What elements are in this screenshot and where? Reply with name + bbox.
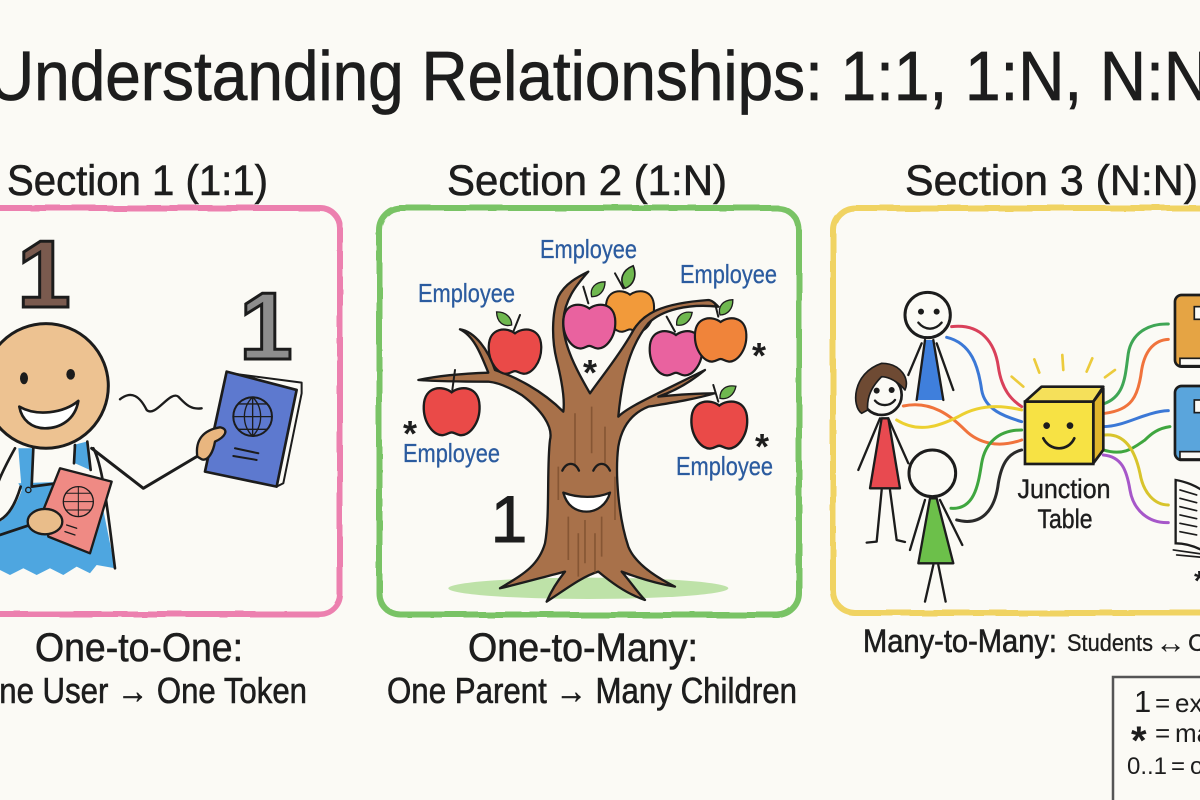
many markers: * [583, 352, 597, 393]
panel: one-to-many [379, 208, 799, 615]
heading: section 3: Section 3 (N:N) [905, 157, 1198, 205]
caption: one-to-one [0, 626, 307, 711]
many markers: * [403, 413, 417, 454]
label: junction table: Table [1038, 504, 1092, 534]
number 1: tree: 1 [491, 482, 527, 556]
heading: section 1: Section 1 (1:1) [7, 157, 268, 205]
label: employee lower left: Employee [403, 438, 500, 468]
pink panel frame [0, 208, 340, 614]
label: junction table: Junction [1018, 474, 1110, 504]
number 1: token: 1 [239, 273, 293, 380]
caption: one-to-one: One-to-One: [35, 626, 243, 670]
legend: exactly one: = [1155, 688, 1170, 718]
legend: optional: = [1171, 753, 1185, 780]
legend box [1113, 677, 1200, 800]
many markers: * [752, 335, 766, 376]
legend: optional: 0..1 [1127, 753, 1167, 780]
heading: section 2: Section 2 (1:N) [447, 157, 727, 205]
many markers: * [755, 426, 769, 467]
caption: one-to-many: One-to-Many: [468, 626, 698, 670]
many markers [403, 335, 769, 467]
caption: many-to-many [863, 623, 1200, 660]
green panel frame [379, 208, 799, 615]
caption: one-to-many: One Parent → Many Children [387, 670, 797, 711]
caption: many-to-many: Many-to-Many: [863, 623, 1057, 659]
illustration: apple tree [418, 264, 747, 602]
label: employee top left: Employee [418, 278, 515, 308]
caption: many-to-many: Students [1067, 630, 1153, 657]
number 1: user: 1 [17, 221, 71, 328]
legend: exactly one: 1 [1134, 684, 1151, 719]
caption: many-to-many: ↔ [1155, 625, 1186, 660]
label: junction table [1018, 474, 1110, 534]
label: employee lower right: Employee [676, 451, 773, 481]
caption: one-to-many [387, 626, 797, 711]
panel: one-to-one [0, 208, 340, 614]
illustration: students, junction table, courses [856, 292, 1200, 602]
illustration: person with passports [0, 324, 302, 575]
label: employee top: Employee [540, 234, 637, 264]
label: employee top right: Employee [680, 259, 777, 289]
legend: many: * [1131, 719, 1147, 763]
legend: many: = [1155, 718, 1170, 748]
panel: many-to-many [833, 208, 1200, 613]
yellow panel frame [833, 208, 1200, 613]
